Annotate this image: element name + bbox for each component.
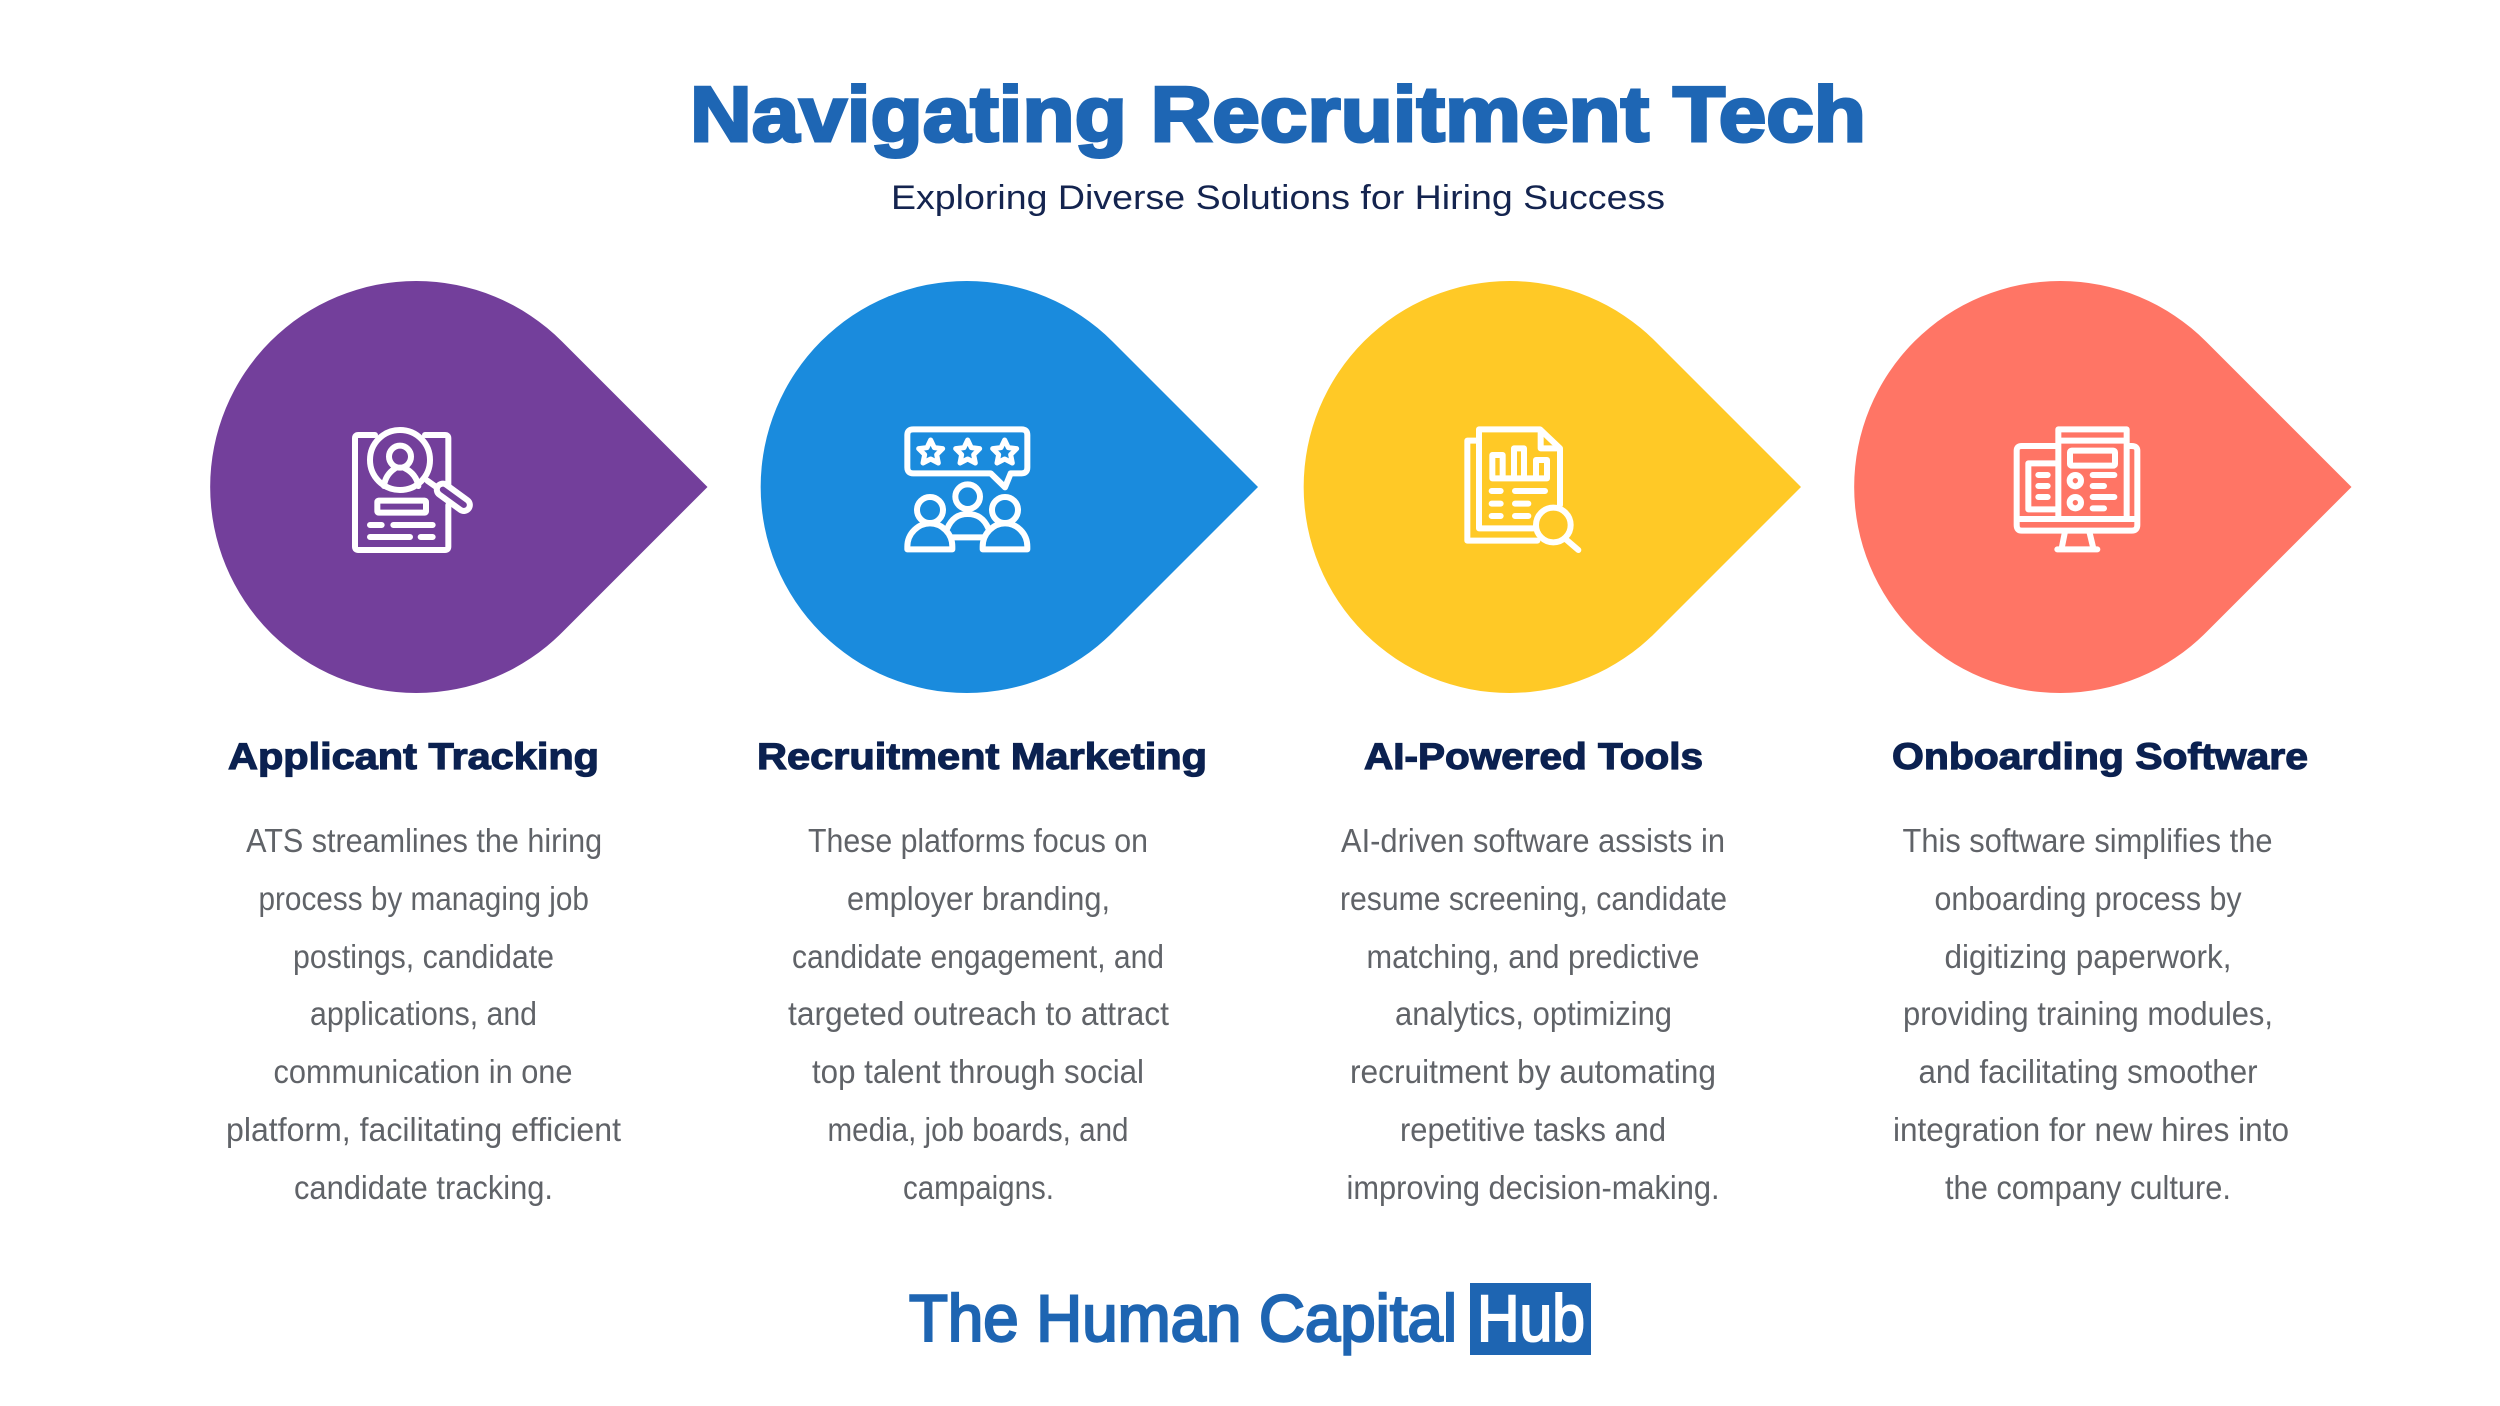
description: These platforms focus on (808, 822, 1148, 859)
logo box (1470, 1283, 1591, 1355)
description: campaigns. (903, 1169, 1054, 1206)
icon: monitor with windows (2017, 429, 2137, 549)
description: integration for new hires into (1893, 1111, 2289, 1148)
description: repetitive tasks and (1400, 1111, 1666, 1148)
logo: The Human Capital Hub (909, 1281, 1591, 1355)
panel: recruitment marketing (757, 281, 1258, 1206)
description: ATS streamlines the hiring (246, 822, 602, 859)
description: process by managing job (258, 880, 589, 917)
teardrop shape: purple (210, 281, 708, 693)
logo wordmark: The Human Capital (909, 1281, 1457, 1355)
description: top talent through social (812, 1053, 1144, 1090)
description (1340, 822, 1727, 1206)
description: candidate engagement, and (792, 938, 1164, 975)
heading: Recruitment Marketing (757, 736, 1207, 777)
description: improving decision-making. (1346, 1169, 1720, 1206)
panel: onboarding software (1854, 281, 2352, 1206)
description: applications, and (310, 995, 537, 1032)
logo box text: Hub (1477, 1281, 1585, 1355)
description: matching, and predictive (1366, 938, 1700, 975)
description: This software simplifies the (1902, 822, 2272, 859)
description (788, 822, 1169, 1206)
panel: AI-powered tools (1304, 281, 1801, 1206)
description: providing training modules, (1903, 995, 2273, 1032)
icon: rating bubble and people (907, 429, 1027, 549)
subtitle: Exploring Diverse Solutions for Hiring Success (891, 179, 1665, 217)
heading: AI-Powered Tools (1364, 736, 1703, 777)
description: targeted outreach to attract (788, 995, 1169, 1032)
description: the company culture. (1945, 1169, 2231, 1206)
teardrop shape: yellow (1304, 281, 1801, 693)
description: onboarding process by (1934, 880, 2242, 917)
description: employer branding, (847, 880, 1110, 917)
description: and facilitating smoother (1918, 1053, 2258, 1090)
heading: Onboarding Software (1892, 736, 2308, 777)
description: recruitment by automating (1350, 1053, 1716, 1090)
description (226, 822, 621, 1206)
description: media, job boards, and (828, 1111, 1128, 1148)
description: digitizing paperwork, (1944, 938, 2232, 975)
teardrop shape: blue (761, 281, 1258, 693)
teardrop shape: coral (1854, 281, 2352, 693)
title: Navigating Recruitment Tech (690, 70, 1866, 158)
description: postings, candidate (293, 938, 554, 975)
icon: report with chart and magnifier (1467, 429, 1578, 550)
description: candidate tracking. (294, 1169, 553, 1206)
description: AI-driven software assists in (1341, 822, 1725, 859)
description: platform, facilitating efficient (226, 1111, 621, 1148)
icon: document with magnifier and person (355, 430, 472, 550)
heading: Applicant Tracking (228, 736, 599, 777)
description: analytics, optimizing (1395, 995, 1672, 1032)
panel: applicant tracking (210, 281, 708, 1206)
description: communication in one (274, 1053, 572, 1090)
description (1893, 822, 2289, 1206)
description: resume screening, candidate (1340, 880, 1727, 917)
